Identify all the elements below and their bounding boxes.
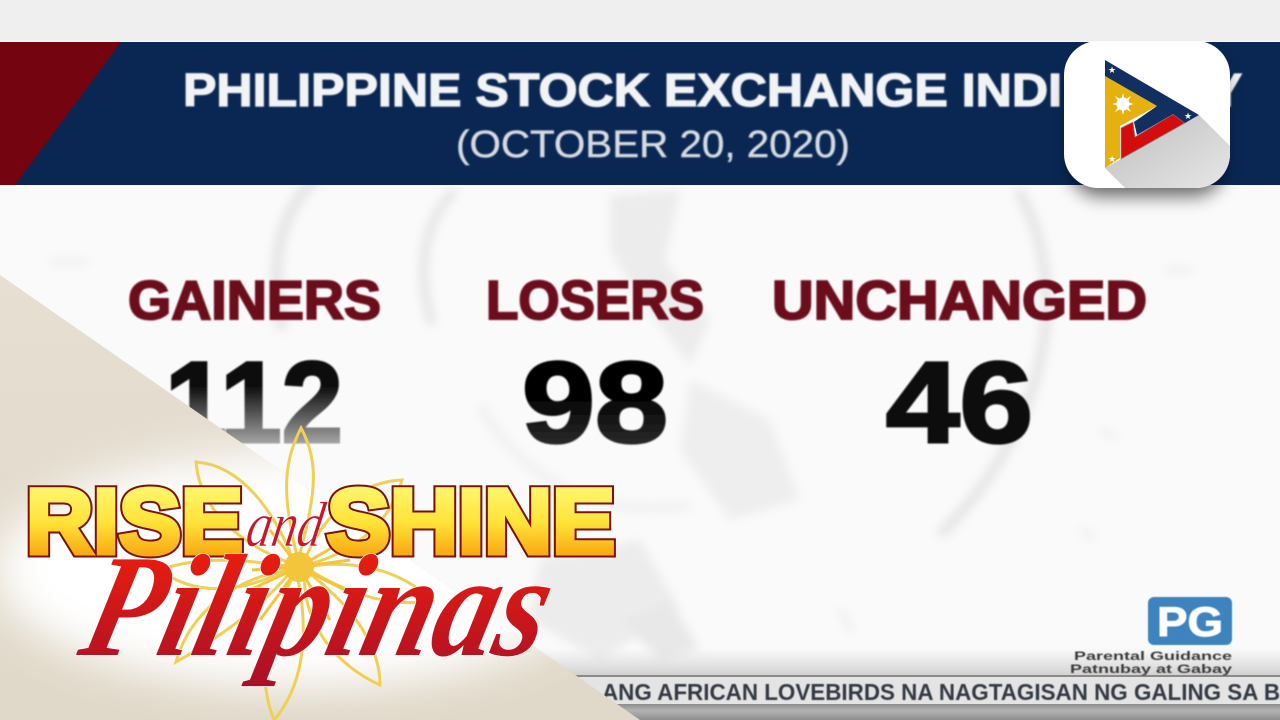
logo long shadow — [1105, 115, 1230, 188]
unchanged column: 46 — [886, 339, 1033, 467]
watermark: globe rings and map — [50, 165, 1193, 660]
wordmark SHINE: SHINE — [327, 471, 615, 573]
PG caption — [1070, 649, 1232, 676]
red corner accent — [0, 42, 121, 185]
unchanged column — [772, 269, 1147, 467]
gainers column: GAINERS — [128, 269, 381, 331]
news ticker — [0, 648, 1280, 720]
logo navy chevron — [1105, 60, 1199, 135]
white glow behind show logo — [0, 452, 605, 688]
date subheading: (OCTOBER 20, 2020) — [456, 124, 850, 166]
news ticker: ANG AFRICAN LOVEBIRDS NA NAGTAGISAN NG GALING SA B — [602, 679, 1280, 705]
PG caption: Patnubay at Gabay — [1070, 662, 1232, 676]
network app logo — [1064, 41, 1240, 200]
PG caption: Parental Guidance — [1074, 649, 1232, 663]
sun core — [250, 530, 350, 620]
wordmark RISE: RISE — [26, 471, 243, 573]
heading: PHILIPPINE STOCK EXCHANGE INDI — [183, 64, 1062, 116]
wordmark Pilipinas: Pilipinas — [67, 526, 570, 687]
logo stars: ★ — [1108, 154, 1116, 164]
cream corner panel — [0, 275, 640, 720]
gainers column — [128, 269, 381, 467]
logo stars — [1108, 65, 1192, 164]
gainers column: 112 — [165, 339, 343, 467]
losers column — [486, 269, 704, 467]
header banner — [0, 42, 1280, 185]
logo stars: ★ — [1108, 65, 1116, 75]
PG rating badge: PG — [1157, 598, 1223, 645]
heading: Y — [1212, 64, 1242, 116]
logo red chevron — [1121, 114, 1185, 159]
losers column: LOSERS — [486, 269, 704, 331]
wordmark and: and — [242, 489, 331, 560]
wordmark SHINE: SHINE — [327, 471, 615, 573]
show logo: Rise and Shine Pilipinas — [26, 428, 615, 720]
logo stars: ★ — [1184, 111, 1192, 121]
sun emblem — [160, 428, 432, 720]
losers column: 98 — [522, 339, 668, 467]
logo yellow triangle — [1105, 76, 1157, 168]
logo sun — [1112, 93, 1134, 115]
unchanged column: UNCHANGED — [772, 269, 1147, 331]
PG rating badge — [1070, 597, 1232, 676]
wordmark RISE: RISE — [26, 471, 243, 573]
